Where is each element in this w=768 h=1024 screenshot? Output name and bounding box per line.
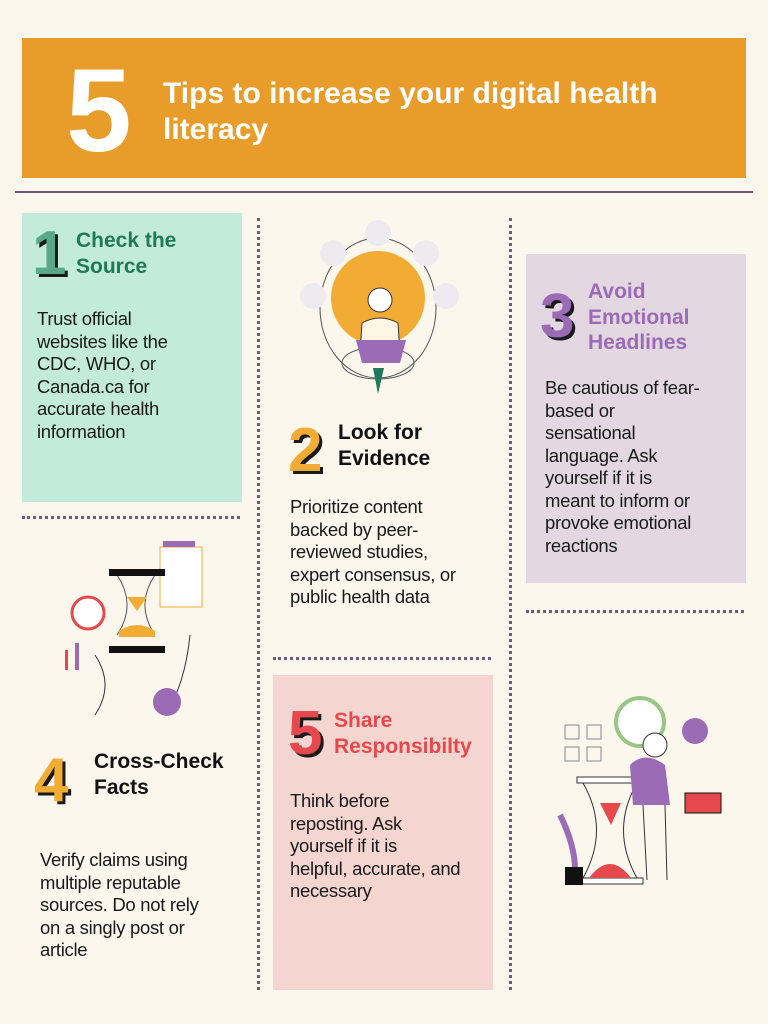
panel: tip 1 check the source	[22, 213, 242, 502]
body 2: public health data	[290, 586, 430, 607]
illustration: hourglass in hand	[65, 541, 202, 716]
body 3: meant to inform or	[545, 490, 690, 510]
number 2: 2	[288, 416, 322, 485]
body 5: necessary	[290, 880, 372, 901]
body 4: sources. Do not rely	[40, 894, 199, 915]
body 4	[40, 849, 199, 960]
panel: tip 4 cross-check facts	[34, 746, 224, 960]
body 5	[290, 790, 460, 901]
number 3: 3	[540, 282, 574, 351]
number 4: 4	[34, 746, 68, 815]
body 5: yourself if it is	[290, 835, 397, 856]
illustration: person with hourglass and clock	[557, 696, 722, 885]
heading 5: Share	[334, 709, 392, 732]
body 3	[545, 377, 699, 556]
body 1: websites like the	[37, 330, 168, 352]
heading 2	[338, 421, 430, 470]
body 4: on a singly post or	[40, 916, 184, 938]
body 5: Think before	[290, 790, 389, 811]
body 3: language. Ask	[545, 444, 657, 466]
heading 4	[94, 750, 224, 798]
body 2: reviewed studies,	[290, 541, 428, 562]
body 1: Trust official	[37, 308, 132, 329]
heading 3: Headlines	[588, 331, 687, 354]
heading 2: Evidence	[338, 446, 430, 470]
header banner	[22, 38, 746, 178]
panel: tip 2 look for evidence	[288, 416, 456, 607]
body 3: based or	[545, 400, 615, 420]
heading 1	[76, 229, 176, 278]
heading 4: Facts	[94, 776, 149, 798]
body 2	[290, 496, 456, 607]
body 5: reposting. Ask	[290, 812, 402, 834]
body 3: reactions	[545, 534, 617, 556]
heading 5: Responsibilty	[334, 734, 472, 758]
body 5: helpful, accurate, and	[290, 858, 460, 878]
heading 3: Emotional	[588, 306, 690, 328]
heading 5	[334, 709, 472, 758]
body 1: CDC, WHO, or	[37, 353, 156, 374]
panel: tip 5 share responsibility	[273, 675, 493, 990]
panel: tip 3 avoid emotional headlines	[526, 254, 746, 583]
body 2: Prioritize content	[290, 496, 422, 517]
body 1: accurate health	[37, 398, 159, 419]
body 3: sensational	[545, 422, 635, 443]
number 1: 1	[32, 219, 66, 288]
body 2: expert consensus, or	[290, 564, 456, 584]
body 4: Verify claims using	[40, 849, 188, 870]
body 3: Be cautious of fear-	[545, 377, 699, 398]
body 4: multiple reputable	[40, 872, 181, 892]
heading 3: Avoid	[588, 280, 646, 303]
heading 4: Cross-Check	[94, 750, 224, 773]
number 5: 5	[288, 699, 322, 768]
big number 5: 5	[66, 45, 132, 177]
heading 1: Source	[76, 254, 147, 278]
body 1: Canada.ca for	[37, 376, 149, 396]
body 2: backed by peer-	[290, 518, 418, 540]
body 3: provoke emotional	[545, 512, 691, 533]
heading 2: Look for	[338, 421, 422, 444]
body 3: yourself if it is	[545, 467, 652, 488]
illustration: person with laptop	[300, 220, 459, 394]
body 1: information	[37, 420, 125, 442]
body 4: article	[40, 939, 87, 960]
body 1	[37, 308, 168, 442]
title: Tips to increase your digital health literacy	[163, 77, 658, 146]
heading 3	[588, 280, 690, 354]
heading 1: Check the	[76, 229, 176, 252]
